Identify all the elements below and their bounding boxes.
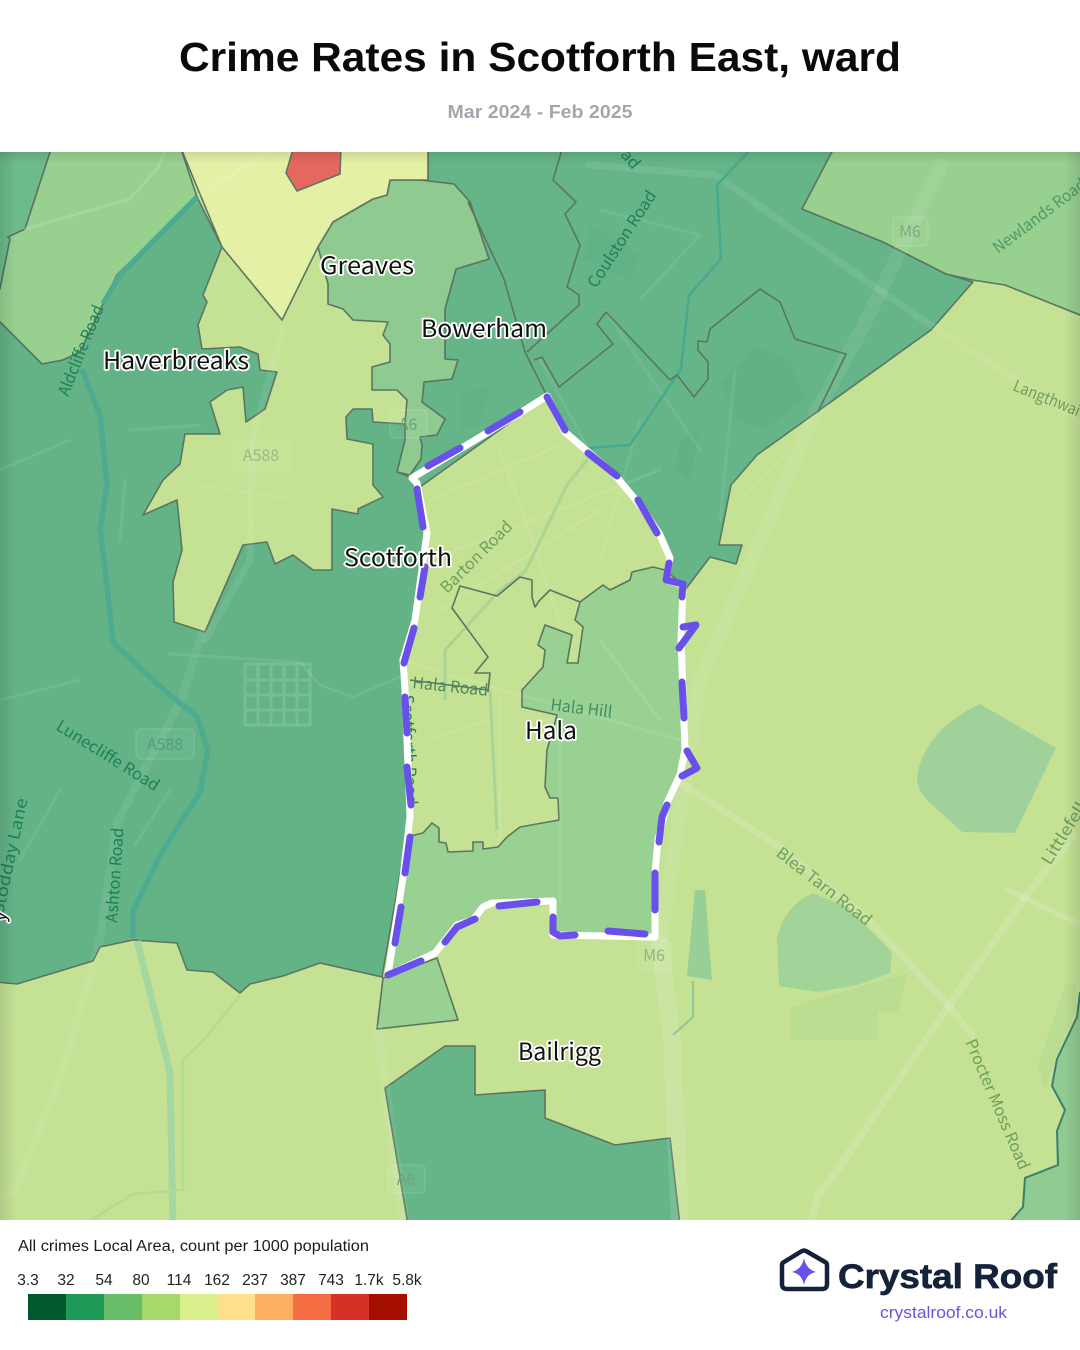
legend tick labels: 114 [167, 1272, 192, 1289]
stream through ward [445, 459, 588, 830]
darker patches in north-east area [460, 225, 805, 480]
east river corner [1007, 993, 1080, 1225]
legend tick labels: 387 [280, 1272, 306, 1289]
road shields: A6 [399, 411, 417, 435]
road shields: A6 [397, 1166, 415, 1190]
logo: Crystal Roof [782, 1250, 1058, 1322]
legend tick labels: 5.8k [392, 1272, 422, 1289]
area: Hala light green [388, 567, 685, 975]
area: far north-west corner [0, 152, 50, 284]
road labels: Lunecliffe Road [52, 713, 165, 796]
legend tick labels: 80 [132, 1272, 150, 1289]
road network [0, 152, 1080, 1225]
area: Greaves light green [318, 180, 489, 475]
road label: Scotforth Road: Scotforth Road [397, 694, 425, 805]
logo wordmark: Crystal Roof [838, 1258, 1058, 1296]
road labels: ad [616, 143, 647, 174]
logo url: crystalroof.co.uk [880, 1304, 1008, 1322]
ward boundary: white underlay [388, 396, 685, 975]
area boundary lines [410, 146, 846, 692]
place labels: Greaves [320, 246, 414, 281]
road shields: M6 [643, 942, 665, 966]
legend title: All crimes Local Area, count per 1000 population [18, 1238, 369, 1255]
area: small south light green [377, 958, 458, 1029]
road labels: Procter Moss Road [960, 1035, 1037, 1173]
place labels: Haverbreaks [103, 341, 249, 376]
river in north-east [588, 152, 748, 448]
road labels: Ashton Road [98, 827, 129, 923]
subtitle: date range: Mar 2024 - Feb 2025 [448, 102, 632, 122]
road labels: Aldcliffe Road [50, 301, 109, 399]
title: Crime Rates in Scotforth East, ward [179, 34, 901, 80]
legend tick labels: 32 [57, 1272, 75, 1289]
area: north-east green (Bowerham, Coulston Road) [410, 146, 973, 590]
road shields: A588 [243, 442, 279, 466]
road labels: Hala Road [411, 669, 490, 701]
area: north centre yellow-green [180, 146, 428, 320]
legend tick labels: 237 [242, 1272, 268, 1289]
ponds and patches [687, 704, 1076, 1090]
legend tick labels: 1.7k [354, 1272, 384, 1289]
area: red hotspot [286, 146, 341, 191]
place labels: Scotforth [344, 538, 452, 573]
ward boundary: purple dashes [388, 397, 697, 975]
road labels: Hala Hill [549, 691, 614, 723]
legend tick labels: 743 [318, 1272, 344, 1289]
river Conder [82, 197, 208, 938]
legend tick labels [17, 1272, 422, 1289]
legend tick labels: 162 [204, 1272, 230, 1289]
place labels [0, 246, 601, 1067]
road labels: Coulston Road [580, 185, 661, 292]
area: north-west light green [0, 146, 197, 364]
area: Newlands light green [802, 146, 1080, 317]
legend tick labels: 54 [95, 1272, 113, 1289]
road labels [0, 143, 1080, 1173]
icon: house with sparkle [782, 1250, 827, 1289]
road labels: Blea Tarn Road [772, 840, 878, 930]
place labels: Hala [525, 711, 577, 746]
area: west dark green (Haverbreaks and Lunecliffe) [0, 197, 427, 993]
legend [17, 1238, 422, 1320]
legend colour scale [28, 1294, 407, 1320]
road shields: A588 [147, 731, 183, 755]
road shields: M6 [899, 218, 921, 242]
place labels: Bailrigg [518, 1032, 601, 1067]
stream in south-west [83, 995, 240, 1225]
place labels: Bowerham [421, 309, 547, 344]
road shields [136, 217, 928, 1193]
stream near south-east pond [673, 981, 693, 1035]
canal south section [137, 941, 173, 1225]
road labels: Barton Road [434, 514, 517, 598]
area: south dark green (Bailrigg campus) [385, 1046, 680, 1225]
legend tick labels: 3.3 [17, 1272, 39, 1289]
